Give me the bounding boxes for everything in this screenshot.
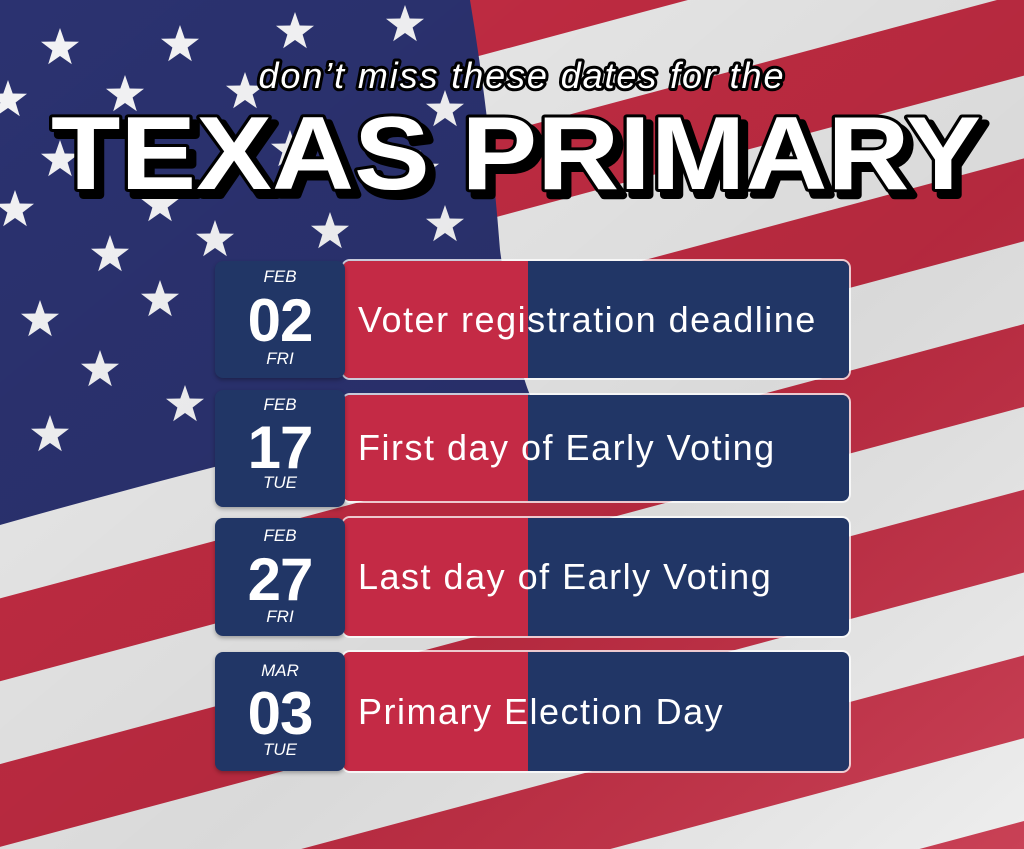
row: first day of early voting — [212, 390, 851, 512]
date: Feb 02 Fri — [215, 261, 345, 378]
date: Mar 03 Tue: TUE — [263, 740, 297, 759]
row: last day of early voting: Last day of Early Voting — [358, 556, 772, 597]
row: first day of early voting: First day of Early Voting — [358, 427, 776, 468]
date: Feb 27 Fri: 27 — [248, 546, 312, 613]
date: Feb 27 Fri — [215, 518, 345, 636]
date: Feb 02 Fri: 02 — [248, 287, 312, 354]
date: Mar 03 Tue — [215, 652, 345, 771]
row: primary election day — [212, 650, 851, 776]
row: voter registration deadline — [214, 259, 851, 382]
date: Feb 17 Tue: TUE — [263, 473, 297, 492]
row: last day of early voting — [212, 516, 851, 640]
row: voter registration deadline: Voter registration deadline — [358, 298, 817, 340]
subtitle: don’t miss these dates for the — [258, 55, 784, 96]
date: Feb 17 Tue: FEB — [263, 395, 297, 414]
row: primary election day: Primary Election Day — [358, 690, 724, 732]
date: Feb 27 Fri: FEB — [263, 526, 297, 545]
title: TEXAS PRIMARY — [51, 96, 981, 210]
date: Mar 03 Tue: MAR — [261, 661, 299, 680]
date: Mar 03 Tue: 03 — [248, 680, 312, 747]
date: Feb 27 Fri: FRI — [266, 607, 294, 626]
date: Feb 02 Fri: FRI — [266, 349, 294, 368]
date: Feb 02 Fri: FEB — [263, 267, 297, 286]
date: Feb 17 Tue — [215, 390, 345, 507]
date: Feb 17 Tue: 17 — [248, 414, 312, 481]
